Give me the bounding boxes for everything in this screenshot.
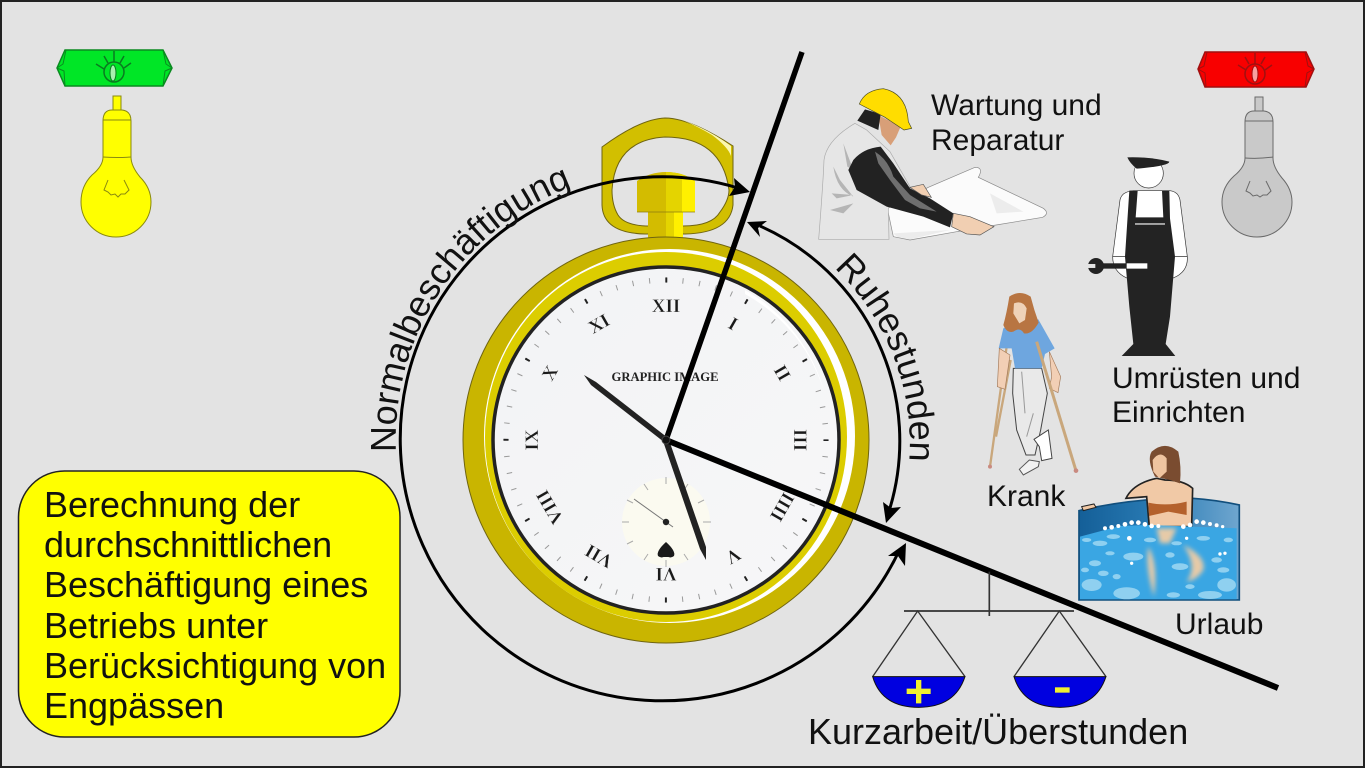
brand text: GRAPHIC IMAGE (612, 369, 718, 384)
roman numerals: I (724, 313, 741, 335)
watch centre pin (662, 436, 670, 444)
callout: yellow description box: Betriebs unter (44, 605, 268, 646)
icon: balance scale (873, 572, 1106, 707)
roman numerals (522, 296, 810, 584)
icon: woman on crutches (988, 293, 1078, 475)
watch ring (602, 118, 733, 234)
label: Krank: Krank (987, 480, 1066, 513)
roman numerals: XII (652, 296, 680, 317)
label: Umrüsten und Einrichten: Einrichten (1112, 396, 1245, 429)
label: Ruhestunden: Ruhestunden (836, 252, 935, 460)
label: Wartung und Reparatur: Wartung und (931, 89, 1102, 122)
icon: woman in hot tub (1079, 446, 1239, 600)
label: Wartung und Reparatur: Reparatur (931, 124, 1064, 157)
icon: green lamp (57, 50, 172, 86)
roman numerals: VIII (532, 486, 568, 528)
icon: yellow light bulb (81, 96, 151, 237)
callout: yellow description box: Berechnung der (44, 484, 300, 525)
roman numerals: VI (655, 563, 677, 584)
roman numerals: XI (585, 310, 614, 339)
label: Normalbeschäftigung: Normalbeschäftigung (371, 170, 570, 450)
sub-dial (622, 477, 711, 567)
minute hand (663, 440, 706, 560)
icon: mechanic with wrench (1087, 157, 1187, 356)
roman numerals: X (538, 362, 563, 384)
label: Kurzarbeit/Überstunden: Kurzarbeit/Überstunden (808, 711, 1188, 752)
roman numerals: III (789, 429, 810, 451)
callout: yellow description box: Engpässen (44, 685, 224, 726)
arrow: Ruhestunden arc (747, 221, 901, 523)
icon: maintenance worker (819, 89, 1046, 240)
arrow: Normalbeschäftigung arc (400, 177, 906, 701)
callout: yellow description box: Beschäftigung eines (44, 564, 368, 605)
pocket watch (463, 118, 869, 643)
watch case (463, 237, 869, 643)
black dividing line: Ruhestunden start (666, 52, 802, 440)
roman numerals: IIII (765, 489, 798, 525)
label: Umrüsten und Einrichten: Umrüsten und (1112, 362, 1300, 395)
hour hand (584, 375, 668, 442)
minute ticks (506, 280, 826, 600)
icon: red lamp (1198, 52, 1314, 87)
roman numerals: IX (522, 429, 543, 451)
label: Urlaub: Urlaub (1175, 608, 1263, 641)
black dividing line: Kurzarbeit boundary (666, 440, 1278, 688)
hour ticks (506, 280, 826, 600)
roman numerals: II (769, 362, 794, 385)
callout: yellow description box (18, 471, 400, 737)
roman numerals: VII (582, 539, 617, 572)
watch crown (637, 172, 695, 238)
roman numerals: V (721, 543, 744, 568)
callout: yellow description box: durchschnittlichen (44, 524, 332, 565)
callout: yellow description box: Berücksichtigung von (44, 645, 386, 686)
icon: grey light bulb (1222, 97, 1292, 237)
watch dial (493, 267, 839, 613)
